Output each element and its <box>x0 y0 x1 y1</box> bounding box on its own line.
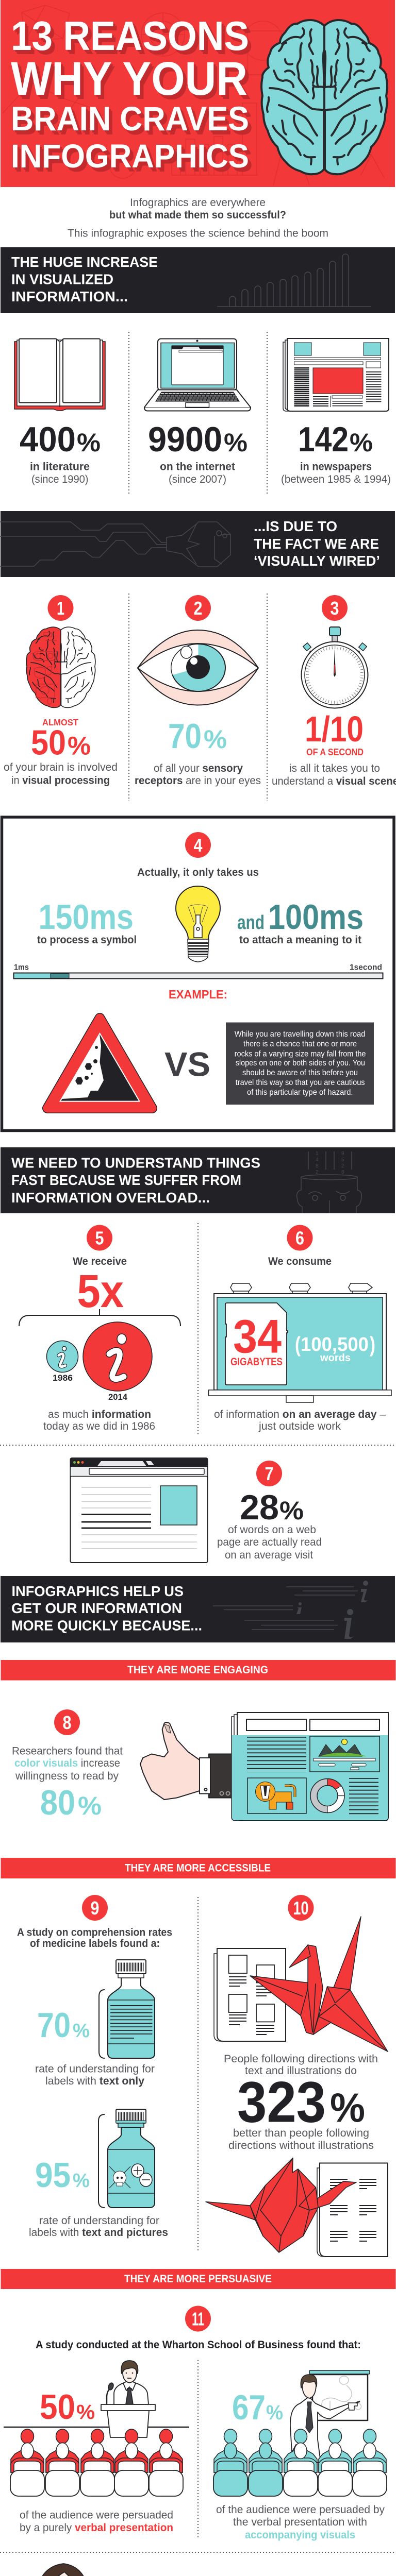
reason 3: OF A SECOND <box>306 747 364 757</box>
reason 7: on an average visit <box>225 1549 313 1561</box>
badge 9 <box>82 1895 108 1921</box>
icon: laptop <box>144 339 251 411</box>
donut chart <box>308 1776 346 1815</box>
stat: 150ms: 150ms <box>38 897 134 937</box>
reason 1: 50 <box>31 723 66 762</box>
band: more accessible <box>1 1858 396 1878</box>
panel: reason 4 framed box <box>2 817 394 1130</box>
verbal presentation: of the audience were persuaded <box>20 2509 173 2521</box>
icon: crumpled crane <box>206 2158 356 2252</box>
icon: half red half white brain <box>26 627 95 708</box>
reason 1: ALMOST <box>42 717 78 727</box>
title: 13 REASONS <box>11 13 249 59</box>
title: 13 REASONS <box>14 17 253 63</box>
title: WHY YOUR <box>11 53 248 105</box>
icon: billboard: ) <box>370 1332 375 1357</box>
reason 5: We receive <box>73 1256 127 1267</box>
decorative bars <box>217 254 371 307</box>
title: INFOGRAPHICS <box>11 138 249 175</box>
decorative digits: 9 <box>341 1151 344 1157</box>
icon: instruction sheet with illustrations <box>214 1948 286 2041</box>
badge 7: 7 <box>265 1463 273 1484</box>
banner: the huge increase <box>1 247 395 313</box>
reason 1: in visual processing <box>11 775 110 786</box>
icon: newspaper <box>283 338 389 411</box>
reason 9: labels with text and pictures <box>29 2227 168 2239</box>
reason 8: willingness to read by <box>15 1770 119 1782</box>
stat: 150ms: to process a symbol <box>37 934 137 946</box>
badge 5 <box>87 1225 112 1251</box>
stat: internet: % <box>224 428 248 457</box>
reason 7 <box>70 1458 322 1563</box>
stat: literature: in literature <box>30 461 90 473</box>
decorative digits: 4 <box>316 1157 319 1163</box>
stat: 100ms <box>237 897 364 946</box>
hero background line art <box>3 5 384 185</box>
icon: billboard: GIGABYTES <box>230 1356 283 1368</box>
heading: FAST BECAUSE WE SUFFER FROM <box>11 1172 241 1188</box>
badge 6: 6 <box>295 1227 304 1249</box>
verbal presentation <box>4 2361 189 2534</box>
reason 9: labels with text only <box>45 2075 144 2087</box>
reason 5: 5x <box>77 1266 124 1317</box>
stat: internet: 9900 <box>148 420 222 459</box>
icon: presenter and projection screen <box>290 2370 370 2463</box>
verbal plus visuals presentation: of the audience were persuaded by <box>216 2504 385 2516</box>
icon: magazine page <box>232 1713 388 1821</box>
intro text: Infographics are everywhere <box>130 197 266 209</box>
title: BRAIN CRAVES <box>13 101 251 140</box>
icon: speaker at podium <box>101 2361 155 2437</box>
reason 1: % <box>68 732 91 760</box>
lion thumbnail <box>248 1778 306 1814</box>
reason 10: % <box>330 2084 365 2131</box>
badge 10 <box>288 1895 314 1921</box>
reason 9 <box>17 1895 172 2239</box>
stat: 95 percent: 95 <box>35 2156 71 2195</box>
reason 2: receptors are in your eyes <box>135 775 261 787</box>
reason 5: as much information <box>48 1409 151 1420</box>
title: BRAIN CRAVES <box>11 99 249 138</box>
stat: literature <box>14 339 105 485</box>
stat: internet: (since 2007) <box>169 473 226 485</box>
decorative digits <box>316 1151 344 1175</box>
reason 8: % <box>78 1791 102 1820</box>
icon: info circle 1986: 1986 <box>53 1373 73 1383</box>
icon: billboard: words <box>320 1352 351 1364</box>
badge 9: 9 <box>91 1897 99 1919</box>
badge 4: 4 <box>194 835 202 856</box>
reason 12 <box>25 2564 382 2576</box>
banner: visually wired <box>0 511 395 577</box>
reason 2: 70 <box>168 717 202 756</box>
verbal plus visuals presentation: 67 <box>232 2388 266 2427</box>
reason 11: A study conducted at the Wharton School of Business found that: <box>36 2339 361 2351</box>
reason 3 <box>272 595 396 787</box>
decorative digits: 8 <box>316 1163 319 1169</box>
reason 2: % <box>204 725 227 754</box>
badge 6 <box>287 1225 312 1251</box>
badge 7 <box>256 1461 282 1486</box>
icon: billboard: 100,500 <box>301 1334 369 1355</box>
reason 9: rate of understanding for <box>39 2215 159 2227</box>
reason 10: 323 <box>237 2070 326 2134</box>
reason 8: Researchers found that <box>12 1745 123 1757</box>
reason 3: 1/10 <box>305 709 364 749</box>
heading: THE HUGE INCREASE <box>11 254 158 270</box>
icon: medicine bottle with pictures <box>98 2109 155 2208</box>
icon: doctor holding clipboard <box>25 2564 157 2576</box>
stat: internet <box>144 339 251 485</box>
verbal presentation: % <box>76 2401 95 2424</box>
reason 8 <box>12 1709 388 1822</box>
stat: newspapers <box>281 338 391 485</box>
icon: browser window <box>70 1458 208 1563</box>
badge 1: 1 <box>57 598 64 619</box>
badge 4 <box>185 832 211 858</box>
icon: billboard: 34 <box>233 1311 282 1363</box>
icon: info circle 1986 <box>46 1341 78 1383</box>
reason 7: 28 <box>240 1488 279 1527</box>
badge 2: 2 <box>194 598 202 619</box>
heading <box>11 1583 202 1633</box>
stat: newspapers: in newspapers <box>300 461 372 473</box>
audience seats <box>10 2429 183 2496</box>
verbal plus visuals presentation: % <box>266 2401 283 2424</box>
stat: 95 percent: % <box>73 2170 90 2192</box>
icon: eye <box>138 630 258 705</box>
reason 6: of information on an average day – <box>214 1409 386 1420</box>
reason 10: directions without illustrations <box>228 2140 374 2151</box>
icon: billboard: ( <box>295 1332 301 1357</box>
reason 5 <box>19 1225 180 1432</box>
icon: stopwatch <box>301 627 368 708</box>
reason 8: 80 <box>40 1783 75 1822</box>
reason 7: % <box>279 1496 304 1525</box>
badge 5: 5 <box>95 1227 104 1249</box>
text block: wordy hazard description: of this particular type of hazard. <box>247 1088 353 1097</box>
title: INFOGRAPHICS <box>13 140 251 177</box>
verbal presentation: by a purely verbal presentation <box>20 2522 173 2534</box>
text block: wordy hazard description: slopes on one or both sides of you. You <box>236 1059 365 1067</box>
text block: wordy hazard description: travel this way so that you are cautious <box>236 1078 365 1087</box>
band: more persuasive <box>1 2269 396 2289</box>
decorative digits: 8 <box>341 1170 344 1175</box>
heading: INFORMATION OVERLOAD... <box>11 1190 210 1206</box>
reason 9: of medicine labels found a: <box>30 1938 160 1950</box>
intro text: This infographic exposes the science behind the boom <box>68 228 328 239</box>
reason 8: color visuals increase <box>14 1757 120 1769</box>
reason 10: People following directions with <box>224 2053 378 2065</box>
heading: ...IS DUE TO <box>254 518 337 534</box>
heading: MORE QUICKLY BECAUSE... <box>11 1618 202 1633</box>
reason 5: today as we did in 1986 <box>43 1420 155 1432</box>
sd card <box>225 1303 288 1385</box>
chart: timeline bar <box>13 963 383 979</box>
text block: wordy hazard description <box>226 1022 374 1105</box>
reason 3: is all it takes you to <box>289 762 380 774</box>
decorative digits: 2 <box>316 1170 319 1175</box>
reason 10: text and illustrations do <box>245 2065 357 2077</box>
panel: reason 4 framed box: VS <box>164 1045 210 1083</box>
decorative plug and wires <box>0 522 230 567</box>
title: 13 REASONS <box>13 15 251 61</box>
heading: WE NEED TO UNDERSTAND THINGS <box>11 1155 260 1171</box>
heading <box>11 254 158 304</box>
title <box>11 13 253 179</box>
heading: INFORMATION... <box>11 289 128 304</box>
reason 2: of all your sensory <box>154 762 243 774</box>
heading: GET OUR INFORMATION <box>11 1600 182 1616</box>
icon: falling rocks road sign <box>47 1018 152 1108</box>
stat: newspapers: (between 1985 & 1994) <box>281 473 391 485</box>
bracket <box>19 1309 180 1326</box>
verbal plus visuals presentation <box>213 2370 387 2541</box>
landscape thumbnail <box>310 1736 380 1772</box>
badge 1 <box>47 595 73 621</box>
reason 11 <box>4 2306 387 2541</box>
reason 6: We consume <box>268 1256 332 1267</box>
stat: newspapers: % <box>350 428 373 457</box>
stat: literature: (since 1990) <box>31 473 89 485</box>
stat: 100ms: 100ms <box>268 897 364 937</box>
reason 6 <box>208 1225 391 1432</box>
reason 10: better than people following <box>233 2127 369 2139</box>
text block: wordy hazard description: should be aware of this before you <box>242 1069 358 1077</box>
badge 11 <box>185 2306 211 2332</box>
stat: internet: on the internet <box>160 461 235 473</box>
title: WHY YOUR <box>13 55 250 107</box>
title: BRAIN CRAVES <box>14 104 253 142</box>
icon: thumbs up hand <box>140 1722 232 1800</box>
intro text <box>68 197 328 239</box>
badge 8: 8 <box>63 1712 71 1733</box>
reason 6: just outside work <box>258 1420 341 1432</box>
band: more persuasive: THEY ARE MORE PERSUASIVE <box>124 2273 272 2285</box>
badge 3: 3 <box>330 598 339 619</box>
icon: open book <box>14 339 105 411</box>
reason 7: of words on a web <box>228 1524 316 1536</box>
reason 1: of your brain is involved <box>4 761 118 773</box>
stat: 70 percent: 70 <box>37 2006 71 2045</box>
reason 7: page are actually read <box>217 1536 322 1548</box>
decorative speeding letters <box>213 1587 358 1630</box>
stat: literature: 400 <box>20 420 76 459</box>
text block: wordy hazard description: rocks of a varying size may fall from the <box>235 1050 366 1058</box>
text block: wordy hazard description: While you are travelling down this road <box>235 1030 365 1039</box>
icon: info circle 2014: 2014 <box>108 1392 128 1402</box>
stat: 100ms: to attach a meaning to it <box>239 934 361 946</box>
stat: literature: % <box>77 428 101 457</box>
decorative i glyphs <box>296 1581 368 1639</box>
heading <box>11 1155 260 1206</box>
stat: 100ms: and <box>237 912 265 934</box>
reason 2 <box>135 595 261 787</box>
decorative digits: 5 <box>341 1157 344 1163</box>
icon: info circle 2014 <box>83 1322 152 1402</box>
badge 3 <box>322 595 348 621</box>
heading: THE FACT WE ARE <box>254 536 379 552</box>
icon: medicine bottle text only <box>99 1960 155 2058</box>
verbal plus visuals presentation: the verbal presentation with <box>233 2516 367 2528</box>
panel: reason 4 framed box: EXAMPLE: <box>169 988 227 1001</box>
chart: timeline bar: 1second <box>350 963 382 972</box>
intro text: but what made them so successful? <box>109 209 286 221</box>
reason 9: rate of understanding for <box>35 2063 155 2075</box>
badge 10: 10 <box>293 1897 308 1919</box>
icon: light bulb <box>176 886 220 962</box>
heading <box>254 518 380 569</box>
decorative overflowing head <box>297 1151 361 1213</box>
stat: 70 percent: % <box>73 2020 90 2042</box>
chart: timeline bar: 1ms <box>14 963 29 972</box>
band: more accessible: THEY ARE MORE ACCESSIBLE <box>125 1862 271 1874</box>
banner: help us get information <box>1 1576 395 1642</box>
icon: plain text sheet <box>317 2163 388 2257</box>
heading: INFOGRAPHICS HELP US <box>11 1583 184 1599</box>
icon: origami crane <box>250 1917 388 2052</box>
heading: ‘VISUALLY WIRED’ <box>254 553 380 569</box>
decorative digits: 1 <box>316 1151 319 1157</box>
verbal plus visuals presentation: accompanying visuals <box>245 2529 355 2541</box>
audience seats, two in teal <box>213 2429 387 2496</box>
panel: reason 4 framed box: Actually, it only takes us <box>137 867 259 878</box>
title: WHY YOUR <box>14 57 251 109</box>
title: INFOGRAPHICS <box>14 142 253 179</box>
verbal presentation: 50 <box>40 2387 75 2427</box>
band: more engaging <box>1 1660 396 1681</box>
icon: billboard <box>208 1283 391 1402</box>
panel: hero header <box>1 0 395 187</box>
icon: brain <box>261 20 387 174</box>
band: more engaging: THEY ARE MORE ENGAGING <box>127 1664 268 1676</box>
heading: IN VISUALIZED <box>11 271 113 287</box>
badge 2 <box>185 595 211 621</box>
text block: wordy hazard description: there is a chance that one or more <box>243 1040 357 1048</box>
banner: information overload <box>1 1147 395 1213</box>
reason 10 <box>206 1895 388 2257</box>
badge 11: 11 <box>192 2308 204 2330</box>
stat: newspapers: 142 <box>298 420 349 459</box>
badge 8 <box>54 1709 80 1735</box>
reason 1 <box>4 595 118 786</box>
reason 9: A study on comprehension rates <box>17 1927 172 1938</box>
decorative digits: 2 <box>341 1163 344 1169</box>
